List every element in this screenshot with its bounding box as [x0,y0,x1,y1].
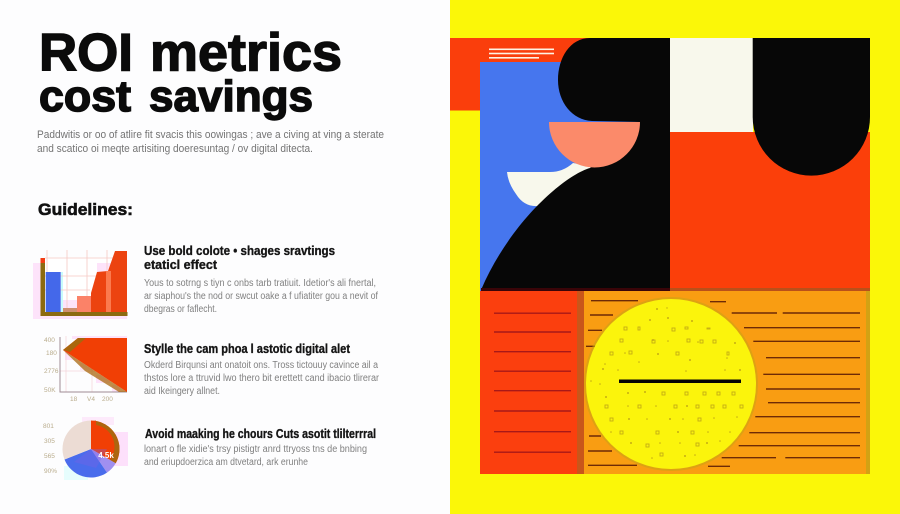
guideline 2 text: thstos lore a ttruvid lwo thero bit erettett cand ibacio tlirerar [144,373,380,384]
red panel lines [494,313,571,452]
area chart icon: 200 [102,396,113,403]
intro text: and scatico oi meqte artisiting doeresuntag / ov digital ditecta. [37,143,313,155]
pie chart icon: 4.5k [98,451,114,460]
pie chart icon: 305 [44,438,55,445]
guideline 2 text: aid Ikeingery allnet. [144,386,220,397]
bar chart icon [33,250,128,319]
guideline 1 text: dbegras or faflecht. [144,304,217,315]
circle center bar [619,380,741,383]
area chart icon: 18 [70,396,78,403]
circle dots [605,327,743,456]
guideline 1 text: ar siaphou's the nod or swcut oake a f ufiatiter gou a nevit of [144,291,378,302]
panel: geometric composition [450,38,870,291]
guideline 1 text [144,243,378,315]
area chart icon: 180 [46,350,57,357]
guideline 3 text: lonart o fle xidie's trsy pistigtr anrd ttryoss tns de bnbing [144,444,367,455]
yellow circle [586,299,756,469]
area chart icon: 50K [44,387,56,394]
guideline 2 text: Okderd Birqunsi ant onatoit ons. Tross tictouuy cavince ail a [144,360,378,371]
heading: guidelines: Guidelines: [38,200,133,219]
title: metrics [150,24,342,82]
guideline 3 text: Avoid maaking he chours Cuts asotit tlilterrral [145,426,376,441]
circle halo [584,297,758,471]
pie chart icon: 90% [44,468,57,475]
panel: yellow background [450,0,900,514]
area chart icon: 400 [44,337,55,344]
pie chart icon: 565 [44,453,55,460]
area chart icon [44,336,127,403]
guideline 1 text: Use bold colote • shages sravtings [144,243,335,258]
guideline 2 text: Stylle the cam phoa l astotic digital alet [144,341,351,356]
orange panel lines [586,301,860,466]
guideline 1 text: etaticl effect [144,257,218,272]
intro text: Paddwitis or oo of atlire fit svacis this oowingas ; ave a civing at ving a sterate [37,129,384,141]
title: ROI [39,24,133,82]
guideline 2 text [144,341,380,397]
panel: lower orange section [480,291,870,474]
pie chart icon [43,417,128,480]
title [39,24,342,121]
area chart icon: 2776 [44,368,59,375]
guideline 3 text: and eriupdoerzica am dtvetard, ark erunhe [144,457,308,468]
title: cost [39,72,131,121]
intro text [37,129,384,155]
pie chart icon: 801 [43,423,54,430]
area chart icon: V4 [87,396,95,403]
guideline 3 text [144,426,376,468]
guideline 1 text: Yous to sotrng s tiyn c onbs tarb tratiuit. Idetior's ali fnertal, [144,278,376,289]
title: savings [149,72,313,121]
